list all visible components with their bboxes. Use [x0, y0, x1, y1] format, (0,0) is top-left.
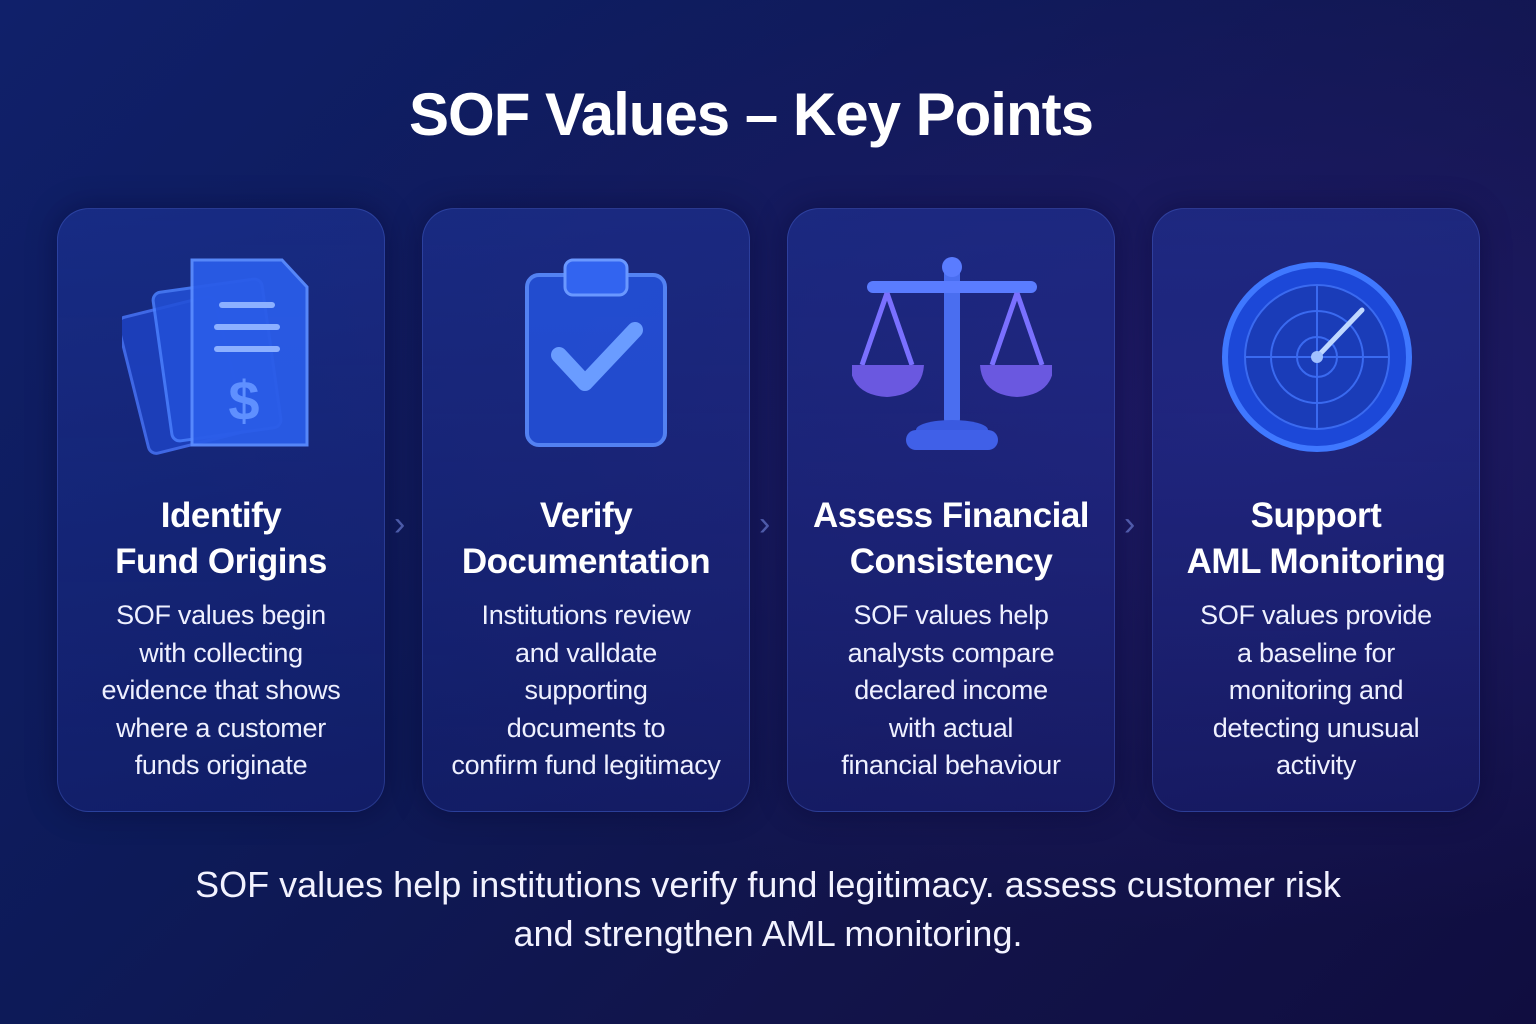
heading — [1187, 496, 1445, 581]
body text: confirm fund legitimacy — [451, 750, 721, 780]
icon: clipboard check — [525, 258, 667, 447]
body text: financial behaviour — [841, 750, 1061, 780]
body text — [1200, 600, 1432, 780]
body text: activity — [1276, 750, 1356, 780]
icon: radar gauge — [1222, 262, 1412, 452]
heading — [813, 496, 1089, 581]
body text: a baseline for — [1237, 638, 1395, 668]
body text — [841, 600, 1061, 780]
body text: SOF values help — [853, 600, 1049, 630]
body text: where a customer — [116, 712, 326, 742]
heading: Verify — [540, 496, 632, 535]
heading: Identify — [161, 496, 281, 535]
panel: support aml monitoring — [1152, 208, 1480, 812]
arrow: › — [1124, 505, 1135, 543]
title: SOF Values – Key Points — [409, 81, 1093, 148]
heading: Documentation — [462, 542, 710, 581]
body text: declared income — [854, 675, 1048, 705]
panel: identify fund origins — [57, 208, 385, 812]
body text: SOF values begin — [116, 600, 326, 630]
icon: balance scale — [852, 257, 1052, 450]
heading: Assess Financial — [813, 496, 1089, 535]
body text: with actual — [889, 712, 1013, 742]
heading: Fund Origins — [115, 542, 327, 581]
icon: documents with dollar: $ — [228, 369, 260, 432]
heading — [462, 496, 710, 581]
arrow: › — [759, 505, 770, 543]
body text: monitoring and — [1229, 675, 1403, 705]
footer summary — [195, 864, 1341, 954]
heading — [115, 496, 327, 581]
body text — [102, 600, 340, 780]
footer summary: SOF values help institutions verify fund legitimacy. assess customer risk — [195, 864, 1341, 905]
body text: funds originate — [135, 750, 307, 780]
body text: documents to — [507, 712, 665, 742]
body text: Institutions review — [482, 600, 690, 630]
body text: analysts compare — [848, 638, 1054, 668]
body text: detecting unusual — [1213, 712, 1419, 742]
body text — [451, 600, 721, 780]
icon: documents with dollar — [122, 258, 308, 455]
body text: SOF values provide — [1200, 600, 1432, 630]
body text: supporting — [524, 675, 648, 705]
arrow: › — [394, 505, 405, 543]
heading: Consistency — [850, 542, 1052, 581]
heading: Support — [1251, 496, 1381, 535]
panel: verify documentation — [422, 208, 750, 812]
panel: assess financial consistency — [787, 208, 1115, 812]
body text: evidence that shows — [102, 675, 340, 705]
heading: AML Monitoring — [1187, 542, 1445, 581]
body text: with collecting — [139, 638, 303, 668]
body text: and valldate — [515, 638, 657, 668]
footer summary: and strengthen AML monitoring. — [514, 913, 1022, 954]
